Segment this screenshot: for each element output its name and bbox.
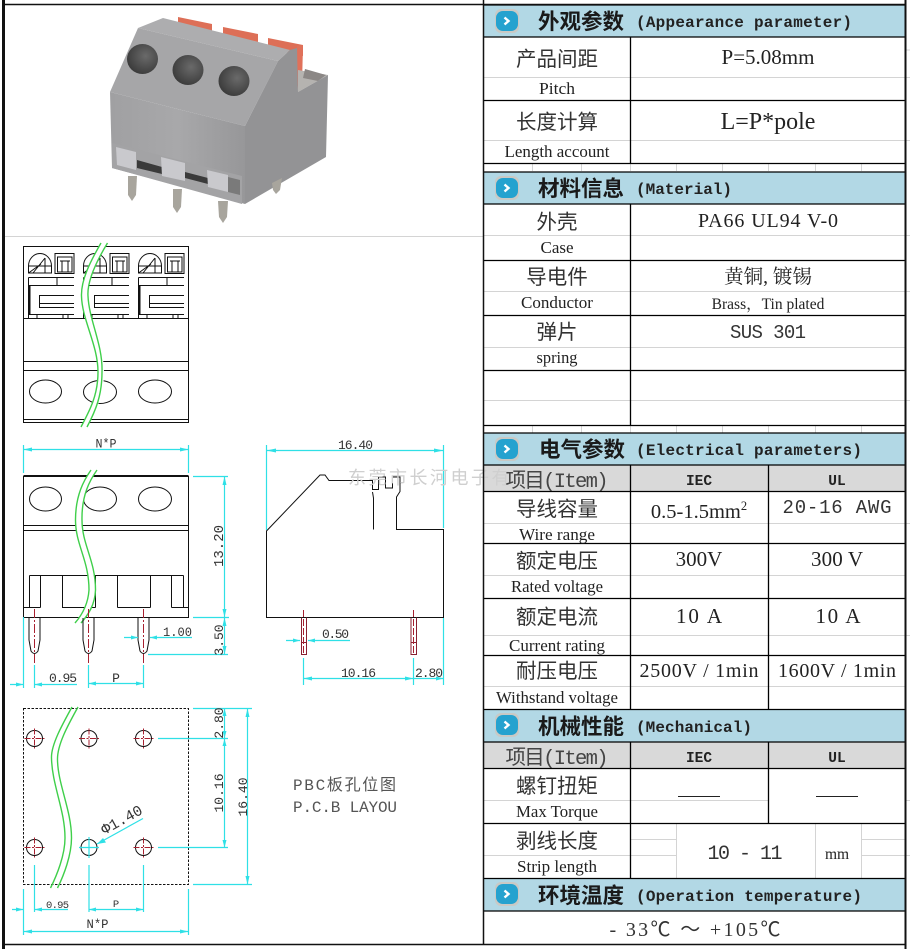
rows: material: 黄铜, 镀锡 xyxy=(724,266,812,288)
rows: appearance xyxy=(504,45,815,161)
rows: appearance: 产品间距 xyxy=(516,48,598,71)
rows: material xyxy=(521,210,838,367)
drawing: top view of terminal xyxy=(24,243,188,427)
wire holes xyxy=(30,380,172,404)
rows: electrical: 0.5-1.5mm xyxy=(651,501,741,523)
spring clips and slots xyxy=(116,147,240,195)
rows: appearance: L=P*pole xyxy=(721,109,815,135)
green wire xyxy=(50,707,78,888)
dimensions for side view: 16.40 xyxy=(338,438,373,453)
rows: material: SUS 301 xyxy=(730,322,806,344)
dimensions for PCB layout: 0.95 xyxy=(46,900,69,912)
wire holes xyxy=(30,487,172,511)
PCB holes xyxy=(24,728,154,858)
rows: appearance: Length account xyxy=(504,142,610,161)
dimensions for side view xyxy=(266,438,444,685)
rows: mechanical: 10 - 11 xyxy=(708,843,782,866)
product photo: terminal block xyxy=(110,17,328,223)
rows: electrical: 耐压电压 xyxy=(516,660,598,683)
rows: mechanical xyxy=(506,747,858,876)
PCB layout caption: PBC板孔位图 xyxy=(293,776,396,795)
drawing: front view of terminal xyxy=(24,470,188,663)
rows: mechanical: 项目(Item) xyxy=(506,747,608,771)
section header: electrical xyxy=(495,437,862,462)
rows: mechanical: mm xyxy=(825,846,849,863)
dimensions for front view: 0.95 xyxy=(49,671,77,686)
rows: electrical: Rated voltage xyxy=(511,577,603,596)
rows: electrical: IEC xyxy=(686,474,712,490)
dimensions for front view: 1.00 xyxy=(163,625,192,640)
terminal cells xyxy=(28,253,184,318)
section header: material: (Material) xyxy=(636,181,732,199)
rows: appearance: Pitch xyxy=(539,79,576,98)
rows: material: Conductor xyxy=(521,293,594,312)
rows: appearance: 长度计算 xyxy=(516,111,598,134)
rows: electrical: 2 xyxy=(741,499,747,513)
rows: material: Brass，Tin plated xyxy=(712,296,825,313)
section header: temperature: (Operation temperature) xyxy=(636,888,862,906)
rows: material: PA66 UL94 V-0 xyxy=(698,210,838,232)
dimensions for front view: 13.20 xyxy=(212,525,228,567)
drawing: side view of terminal xyxy=(266,475,444,654)
dimensions for PCB layout: 2.80 xyxy=(212,707,227,739)
rows: mechanical: 剥线长度 xyxy=(516,830,598,853)
PCB layout caption xyxy=(293,776,397,817)
rows: electrical: 1600V / 1min xyxy=(778,660,896,682)
rows: electrical: Wire range xyxy=(519,525,595,544)
temperature value: - 33℃ ～ +105℃ xyxy=(610,919,780,941)
section header: appearance xyxy=(495,9,852,34)
side pins xyxy=(302,610,416,654)
PCB layout caption: P.C.B LAYOU xyxy=(293,799,397,817)
drawing: PCB hole layout xyxy=(24,707,188,888)
rows: mechanical: 螺钉扭矩 xyxy=(516,775,598,798)
section header: electrical: (Electrical parameters) xyxy=(636,442,862,460)
green wire xyxy=(81,243,108,427)
rows: electrical: 额定电流 xyxy=(516,606,598,629)
rows: electrical: 额定电压 xyxy=(516,550,598,573)
dimensions for PCB layout xyxy=(12,707,252,935)
pins xyxy=(29,609,149,663)
rows: material: Case xyxy=(540,238,574,257)
rows: electrical: UL xyxy=(828,474,846,490)
section header: electrical: 电气参数 xyxy=(539,437,625,462)
header bands and grey item rows xyxy=(484,5,905,911)
section header: material: 材料信息 xyxy=(538,176,624,201)
rows: mechanical: UL xyxy=(828,751,846,767)
dimensions for side view: 2.80 xyxy=(415,666,443,681)
section header: mechanical xyxy=(495,713,752,739)
rows: material: spring xyxy=(536,348,578,367)
dimensions for front view xyxy=(10,476,229,688)
section header: appearance: (Appearance parameter) xyxy=(636,14,852,32)
rows: electrical: 300V xyxy=(676,547,722,571)
dimensions for PCB layout: 10.16 xyxy=(212,773,227,813)
rows: electrical: 导线容量 xyxy=(516,498,598,521)
dimension: N*P top xyxy=(24,436,188,473)
dimensions for PCB layout: N*P xyxy=(86,917,109,932)
dimensions for side view: 10.16 xyxy=(341,666,376,681)
section header: material xyxy=(495,176,732,201)
section header: temperature: 环境温度 xyxy=(538,884,624,908)
rows: mechanical: Strip length xyxy=(517,857,598,876)
pins xyxy=(128,176,282,223)
rows: material: 外壳 xyxy=(536,211,578,234)
section header: mechanical: (Mechanical) xyxy=(636,719,752,737)
rows: mechanical: IEC xyxy=(686,751,712,767)
dimensions for front view: 3.50 xyxy=(212,624,227,656)
rows: electrical: 10 A xyxy=(816,604,861,628)
rows: material: 导电件 xyxy=(526,266,588,289)
rows: electrical: 项目(Item) xyxy=(506,470,608,494)
rows: electrical: 2500V / 1min xyxy=(640,660,758,682)
watermark: 东莞市长河电子有 xyxy=(348,468,512,488)
rows: material: 弹片 xyxy=(536,321,578,344)
section header: temperature xyxy=(495,882,862,908)
dimensions for front view: P xyxy=(112,671,120,686)
dimension: N*P top: N*P xyxy=(96,436,117,452)
rows: electrical: 20-16 AWG xyxy=(782,497,892,519)
orange push tabs xyxy=(178,17,303,91)
dimensions for PCB layout: Φ1.40 xyxy=(98,803,146,839)
rows: electrical: 300 V xyxy=(811,547,863,571)
section header: mechanical: 机械性能 xyxy=(538,715,624,739)
green wire xyxy=(75,470,97,623)
dimensions for PCB layout: 16.40 xyxy=(236,777,251,817)
rows: appearance: P=5.08mm xyxy=(722,45,814,69)
rows: electrical: Withstand voltage xyxy=(496,688,618,707)
wire entry holes xyxy=(127,44,250,96)
rows: mechanical: Max Torque xyxy=(516,802,598,821)
rows: electrical xyxy=(496,470,896,707)
section header: appearance: 外观参数 xyxy=(538,9,624,34)
rows: electrical: Current rating xyxy=(509,636,605,655)
rows: electrical: 10 A xyxy=(676,604,723,628)
dimensions for PCB layout: P xyxy=(113,899,119,911)
dimensions for side view: 0.50 xyxy=(322,627,349,642)
